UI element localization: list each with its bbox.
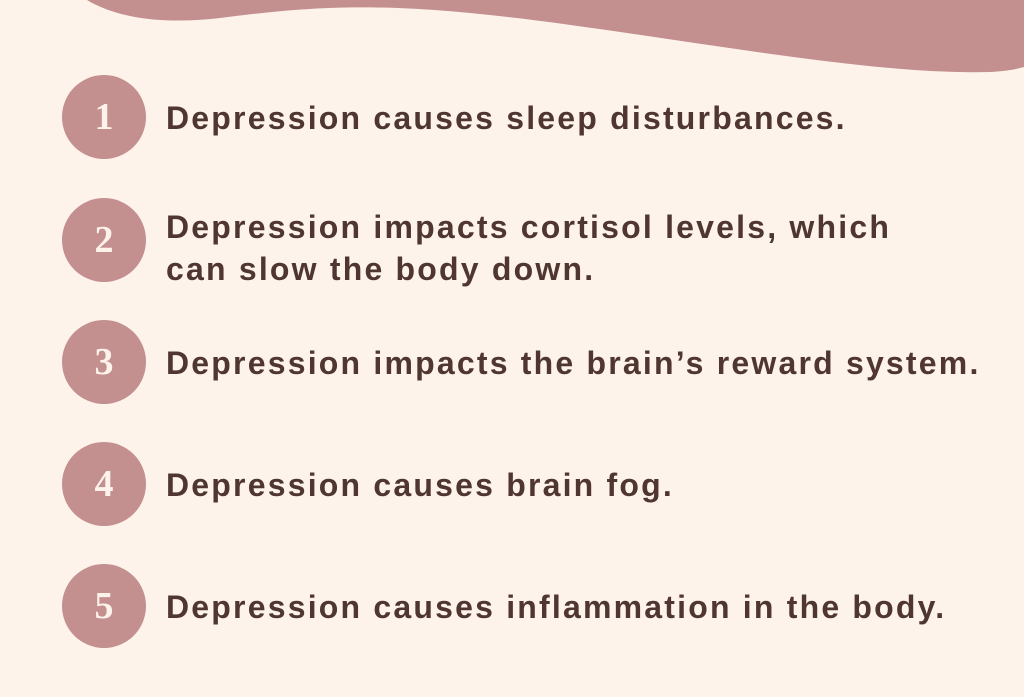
item 2	[62, 198, 146, 282]
item 4	[62, 442, 146, 526]
text 1: Depression causes sleep disturbances.	[166, 100, 847, 136]
text 3: Depression impacts the brain’s reward system.	[166, 345, 981, 381]
item 1	[62, 75, 146, 159]
item 3: 3	[94, 341, 114, 383]
text 4: Depression causes brain fog.	[166, 467, 674, 503]
item 4: 4	[94, 463, 114, 505]
item 1: 1	[94, 96, 114, 138]
item 5: 5	[94, 585, 114, 627]
item 3	[62, 320, 146, 404]
text 2: can slow the body down.	[166, 251, 595, 287]
text 5: Depression causes inflammation in the body.	[166, 589, 946, 625]
item 2: 2	[94, 219, 114, 261]
text 2	[166, 209, 891, 287]
item 5	[62, 564, 146, 648]
text 2: Depression impacts cortisol levels, which	[166, 209, 891, 245]
decorative wave	[87, 0, 1024, 72]
